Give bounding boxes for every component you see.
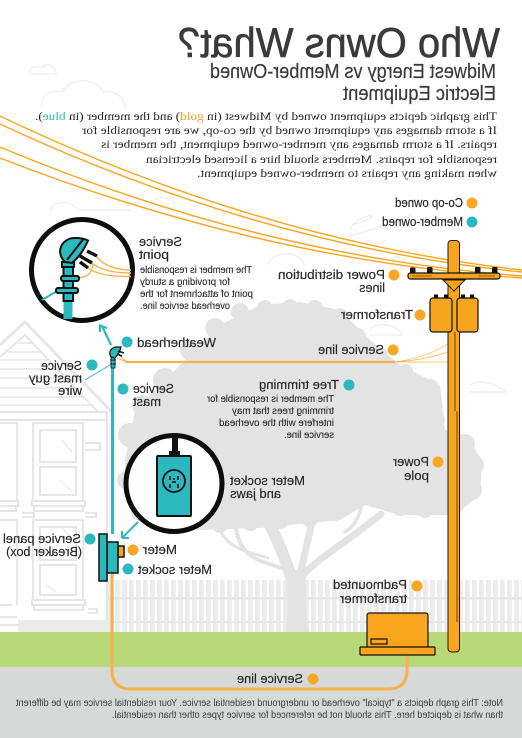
label: service point: point — [138, 248, 169, 262]
meter assembly — [99, 534, 124, 581]
underground service line — [112, 573, 407, 689]
intro paragraph: repairs. If a storm damages any member-owned equipment, the member is — [100, 139, 497, 151]
mast guy wire — [85, 365, 110, 380]
intro paragraph: responsible for repairs. Members should hire a licensed electrician — [146, 154, 497, 166]
label: meter socket and jaws: Meter socket — [229, 474, 305, 488]
label: service mast — [132, 382, 174, 409]
road — [0, 667, 522, 738]
house foundation — [18, 620, 108, 632]
service point description: for providing a sturdy — [140, 277, 230, 288]
legend: Member-owned — [382, 215, 463, 229]
label: padmounted transformer: Padmounted — [333, 578, 407, 592]
label: padmounted transformer: transformer — [340, 592, 407, 606]
label: service mast: mast — [132, 395, 161, 409]
background clouds — [30, 65, 505, 392]
label: power pole — [393, 455, 429, 483]
tree trimming description: interfere with the overhead — [219, 418, 334, 429]
service point description: overhead service line. — [140, 301, 230, 312]
guy wire — [42, 291, 57, 300]
house — [0, 322, 113, 632]
weatherhead body — [56, 238, 88, 301]
intro paragraph: This graphic depicts equipment owned by Midwest (in gold) and the member (in blue). — [35, 111, 497, 123]
title: Who Owns What? — [178, 19, 500, 66]
label: service mast: Service — [133, 382, 174, 396]
service wires — [78, 257, 131, 278]
insulators — [80, 251, 97, 268]
service point description: The member is responsible — [140, 265, 252, 276]
tree trimming description — [206, 394, 334, 441]
power distribution lines — [0, 116, 522, 278]
label: meter socket: Meter socket — [137, 563, 212, 577]
service mast — [111, 362, 114, 534]
label: service point: Service — [139, 235, 182, 249]
label: service panel — [3, 532, 82, 559]
grass — [0, 632, 522, 667]
subtitle: Midwest Energy vs Member-Owned — [210, 61, 496, 83]
label: power pole: pole — [404, 469, 429, 483]
arrow to service point — [99, 325, 111, 345]
label: power distribution lines: lines — [359, 281, 385, 295]
label: power pole: Power — [393, 455, 429, 469]
label: service mast guy wire — [28, 359, 83, 398]
label: meter socket and jaws — [229, 474, 305, 501]
service point description — [140, 265, 253, 312]
label: service panel: (Breaker box) — [6, 545, 82, 559]
label: service mast guy wire: Service — [41, 359, 82, 373]
label: underground service line: Service line — [237, 672, 303, 686]
subtitle — [210, 61, 496, 105]
tree trimming description: The member is responsible for — [206, 394, 334, 405]
tree trimming description: trimming trees that may — [232, 406, 334, 417]
label: service point — [138, 235, 182, 262]
note: than what is depicted here. This should not be referenced for service types other than residential. — [112, 709, 503, 721]
label: service mast guy wire: mast guy — [28, 372, 82, 386]
mast — [64, 300, 72, 319]
subtitle: Electric Equipment — [343, 83, 496, 105]
label: padmounted transformer — [333, 578, 407, 606]
service point description: point of attachment for the — [140, 289, 253, 300]
label: tree trimming: Tree trimming — [259, 378, 339, 392]
label: meter: Meter — [143, 543, 177, 557]
note — [16, 697, 503, 721]
label: service panel: Service panel — [3, 532, 81, 546]
label: service mast guy wire: wire — [58, 384, 83, 398]
label: power distribution lines — [278, 268, 385, 295]
insulators — [410, 267, 498, 273]
tree trimming description: service line. — [284, 430, 334, 441]
crossarm — [408, 273, 500, 279]
intro paragraph: when making any repairs to member-owned equipment. — [197, 168, 497, 180]
label: weatherhead: Weatherhead — [137, 336, 216, 350]
label: meter socket and jaws: and jaws — [230, 487, 281, 501]
intro paragraph: If a storm damages any equipment owned by the co-op, we are responsible for — [82, 125, 497, 137]
intro paragraph — [35, 111, 497, 180]
small weatherhead — [110, 347, 124, 368]
power pole — [408, 240, 500, 652]
padmounted transformer — [360, 613, 435, 655]
overhead service line — [117, 344, 448, 362]
label: power distribution lines: Power distribution — [278, 268, 385, 282]
label: service line: Service line — [318, 343, 384, 357]
legend — [382, 196, 463, 229]
label: transformer: Transformer — [341, 308, 413, 322]
transformers — [430, 298, 478, 332]
tree — [117, 299, 484, 632]
circle: meter socket detail — [126, 433, 222, 532]
arrow to meter socket — [122, 522, 138, 538]
member dots — [84, 216, 478, 574]
legend: Co-op owned — [395, 196, 463, 210]
legend and co-op dots — [128, 198, 478, 684]
fence — [108, 580, 522, 632]
circle: service point detail — [32, 220, 132, 320]
